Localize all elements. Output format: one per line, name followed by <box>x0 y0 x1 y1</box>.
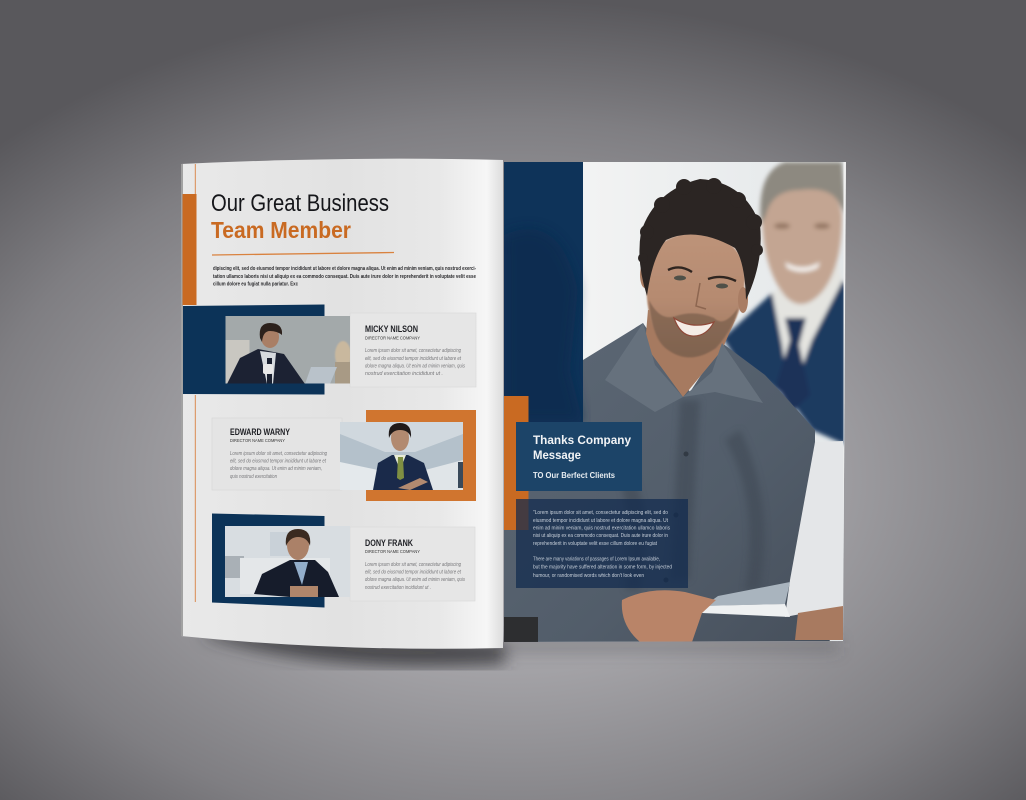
intro paragraph: tation ullamco laboris nisi ut aliquip ex ea commodo consequat. Duis aute irure dolor in reprehenderit in voluptate velit esse <box>213 274 476 280</box>
laptop <box>700 441 843 617</box>
page sheet <box>181 159 503 649</box>
name: DONY FRANK <box>365 538 413 548</box>
photo: man with coffee cup <box>226 316 351 384</box>
bio: elit, sed do eiusmod tempor incididunt ut labore et <box>365 570 462 576</box>
bio: Lorem ipsum dolor sit amet, consectetur adipiscing <box>365 348 461 354</box>
navy block <box>212 514 324 608</box>
shirt buttons <box>664 452 688 582</box>
photo background <box>504 162 846 642</box>
name: EDWARD WARNY <box>230 427 290 437</box>
bio: Lorem ipsum dolor sit amet, consectetur adipiscing <box>365 562 461 568</box>
team card: Edward Warny <box>212 410 476 501</box>
heading: Thanks Company <box>533 433 631 447</box>
orange margin strip <box>182 194 196 305</box>
role: DIRECTOR NAME COMPANY <box>365 336 421 342</box>
ghost portrait in column <box>504 229 583 422</box>
bio <box>230 451 327 480</box>
bio <box>365 348 465 377</box>
subheading: TO Our Berfect Clients <box>533 471 616 480</box>
message body: humour, or randomised words which don't look even <box>533 573 644 579</box>
bio: elit, sed do eiusmod tempor incididunt ut labore et <box>230 458 327 464</box>
bio: nostrud exercitation incididunt ut . <box>365 585 431 591</box>
name: MICKY NILSON <box>365 324 418 334</box>
title: Team Member <box>211 217 351 243</box>
hands <box>622 590 843 642</box>
blurred man in suit <box>723 162 846 445</box>
collar <box>605 323 763 412</box>
page edge highlight <box>844 162 846 553</box>
intro paragraph: dipiscing elit, sed do eiusmod tempor incididunt ut labore et dolore magna aliqua. Ut enim ad minim veniam, quis nostrud exerci- <box>213 266 476 272</box>
title: Our Great Business <box>211 190 389 217</box>
message heading box: Message <box>533 448 581 462</box>
stubble <box>649 300 738 358</box>
right page: thanks message <box>504 162 846 642</box>
text panel <box>350 313 476 387</box>
bio: dolore magna aliqua. Ut enim ad minim veniam, quis <box>365 364 465 370</box>
text panel <box>212 418 342 490</box>
intro paragraph: cillum dolore eu fugiat nulla pariatur. Exc <box>213 282 298 288</box>
role: DIRECTOR NAME COMPANY <box>365 549 421 555</box>
intro paragraph <box>213 266 476 288</box>
bio: elit, sed do eiusmod tempor incididunt ut labore et <box>365 356 462 362</box>
message body: There are many variations of passages of Lorem Ipsum available, <box>533 556 660 562</box>
message body: nisi ut aliquip ex ea commodo consequat. Duis aute irure dolor in <box>533 533 668 539</box>
message body: enim ad minim veniam, quis nostrud exercitation ullamco laboris <box>533 526 670 532</box>
curly hair <box>638 178 763 300</box>
message body: reprehenderit in voluptate velit esse cillum dolore eu fugiat <box>533 541 658 547</box>
text panel <box>350 527 475 601</box>
bio <box>365 562 465 591</box>
orange margin rule <box>195 164 196 602</box>
navy column <box>504 162 583 422</box>
message body: eiusmod tempor incididunt ut labore et dolore magna aliqua. Ut <box>533 518 669 524</box>
message text box <box>516 499 688 588</box>
photo: man with crossed arms <box>340 422 463 490</box>
bio: nostrud exercitation incididunt ut . <box>365 371 443 377</box>
title underline <box>212 252 394 255</box>
orange block <box>366 410 476 501</box>
message body: but the majority have suffered alteration in some form, by injected <box>533 564 672 570</box>
smile <box>674 318 714 336</box>
bio: dolore magna aliqua. Ut enim ad minim veniam, <box>230 466 322 472</box>
shirt folds <box>624 400 762 589</box>
navy block <box>183 304 324 394</box>
bio: dolore magna aliqua. Ut enim ad minim veniam, quis <box>365 577 465 583</box>
shadow under brochure <box>205 630 838 667</box>
title <box>211 190 389 243</box>
orange strip <box>504 396 528 530</box>
bio: Lorem ipsum dolor sit amet, consectetur adipiscing <box>230 451 327 457</box>
team card: Micky Nilson <box>183 304 476 394</box>
eyes and brows <box>668 267 736 309</box>
page left edge <box>181 164 183 636</box>
role: DIRECTOR NAME COMPANY <box>230 438 286 444</box>
ears <box>640 268 748 313</box>
face <box>646 234 745 330</box>
message body: "Lorem ipsum dolor sit amet, consectetur adipiscing elit, sed do <box>533 510 668 516</box>
message heading box <box>516 422 642 491</box>
neck <box>645 310 735 397</box>
team card: Dony Frank <box>212 514 475 608</box>
camera at bottom left <box>504 617 538 642</box>
main man: shirt <box>504 323 830 642</box>
bio: quis nostrud exercitation <box>230 474 277 480</box>
photo: smiling seated man <box>225 526 350 597</box>
left page: team members <box>181 159 503 649</box>
message body <box>533 510 672 579</box>
